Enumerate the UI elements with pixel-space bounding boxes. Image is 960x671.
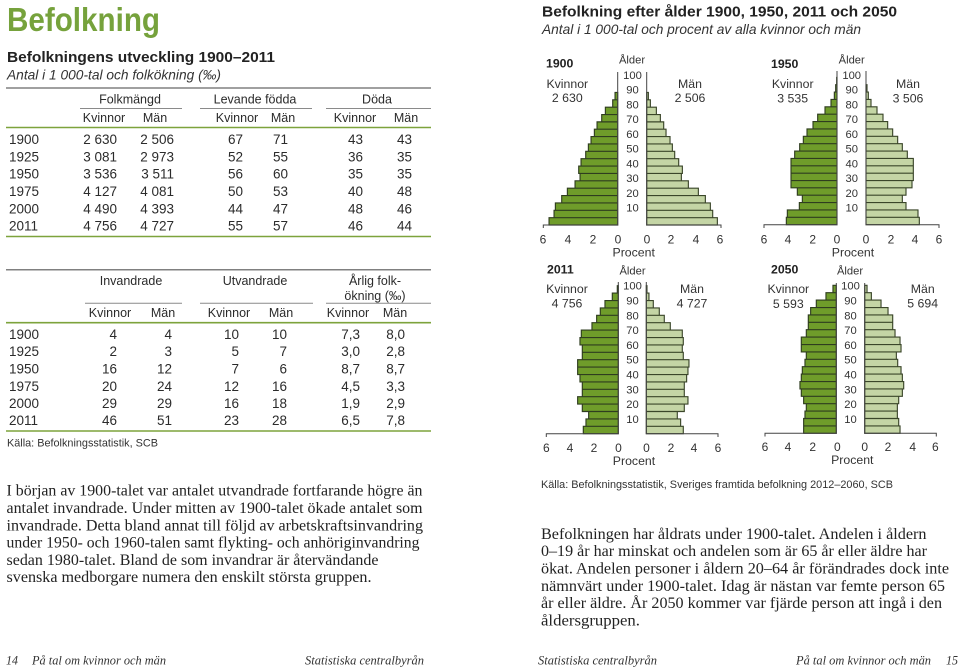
chart: pyramid 2011: 2011 <box>547 263 574 277</box>
text block: immigration <box>6 483 423 586</box>
table: migration and annual growth: 2011 <box>9 413 38 428</box>
source note: left: Källa: Befolkningsstatistik, SCB <box>7 438 158 450</box>
chart: pyramid 2050: 2050 <box>771 263 799 277</box>
table: population, births, deaths: 67 <box>228 132 243 147</box>
table: population, births, deaths: Män <box>271 111 295 125</box>
table: population, births, deaths: 43 <box>348 132 363 147</box>
table: population, births, deaths: 40 <box>348 184 363 199</box>
table: migration and annual growth: 4,5 <box>341 379 360 394</box>
footer: left page: På tal om kvinnor och män <box>31 653 166 668</box>
chart: pyramid 1900: 6 <box>717 232 724 246</box>
table: migration and annual growth: 16 <box>102 362 117 376</box>
heading: table <box>6 49 275 82</box>
table: population, births, deaths: 2 973 <box>140 150 174 164</box>
chart: pyramid 2011: 60 <box>626 340 639 352</box>
chart: pyramid 1900: 80 <box>626 100 639 112</box>
table: population, births, deaths: 44 <box>228 201 243 216</box>
chart: pyramid 2050: 5 593 <box>773 297 804 311</box>
chart: pyramid 1900: 60 <box>626 129 639 141</box>
chart: pyramid 2050: 90 <box>844 296 857 308</box>
table: migration and annual growth: Män <box>269 306 293 320</box>
chart: pyramid 2050: 20 <box>844 399 857 411</box>
table: population, births, deaths: 1950 <box>9 167 39 182</box>
table: migration and annual growth: 6 <box>279 362 287 376</box>
chart: pyramid 2011: 50 <box>626 355 639 367</box>
table: migration and annual growth: 4 <box>109 327 117 342</box>
chart: pyramid 1950: 60 <box>845 129 858 141</box>
chart: pyramid 2050: 2 <box>885 440 892 454</box>
heading: population pyramids: Befolkning efter ålder 1900, 1950, 2011 och 2050 <box>542 4 897 20</box>
table: migration and annual growth: 8,7 <box>386 362 405 376</box>
chart: pyramid 1950: 2 <box>809 232 816 246</box>
table: migration and annual growth: Män <box>383 306 407 320</box>
chart: pyramid 1900: Män <box>678 77 702 91</box>
table: migration and annual growth: 4 <box>164 327 172 342</box>
chart: pyramid 2011: 30 <box>626 384 639 396</box>
chart: pyramid 1900: 20 <box>626 188 639 200</box>
heading: population pyramids: Antal i 1 000-tal och procent av alla kvinnor och män <box>541 22 861 37</box>
chart: pyramid 2050: 50 <box>844 355 857 367</box>
chart: pyramid 1900: 4 <box>693 232 700 246</box>
chart: pyramid 1950: 6 <box>936 232 943 246</box>
chart: pyramid 1900: 50 <box>626 144 639 156</box>
table: migration and annual growth: Kvinnor <box>327 306 369 320</box>
chart: pyramid 1900: 2 <box>590 232 597 246</box>
table: migration and annual growth: Män <box>151 306 175 320</box>
table: migration and annual growth: 3 <box>164 344 172 359</box>
table: population, births, deaths: 35 <box>397 150 412 164</box>
table: migration and annual growth: 1,9 <box>341 396 360 411</box>
text block: ageing: ökat. Andelen personer i åldern 20–64 år förändrades dock inte <box>541 561 949 578</box>
table: migration and annual growth: 1975 <box>9 379 39 394</box>
chart: pyramid 1900: Kvinnor <box>546 77 588 91</box>
table: migration and annual growth: 7 <box>279 344 287 359</box>
table: population, births, deaths: 47 <box>273 201 288 216</box>
table: migration and annual growth: 1950 <box>9 362 39 376</box>
chart: pyramid 1950: 70 <box>845 114 858 126</box>
heading: table: Befolkningens utveckling 1900–2011 <box>7 49 275 66</box>
table: population, births, deaths: 71 <box>273 132 288 147</box>
chart: pyramid 1950: 30 <box>845 173 858 185</box>
chart: pyramid 1950: 3 535 <box>777 92 808 106</box>
chart: pyramid 2050: 10 <box>844 414 857 426</box>
footer: left page <box>6 653 424 668</box>
table: population, births, deaths: 3 536 <box>83 167 117 182</box>
chart: pyramid 2050: Procent <box>831 453 874 467</box>
table: population, births, deaths: 36 <box>348 150 363 164</box>
table: population, births, deaths: 48 <box>397 184 412 199</box>
table: population, births, deaths: 2000 <box>9 201 39 216</box>
chart: pyramid 2011: 2 <box>668 441 675 455</box>
table: migration and annual growth: Årlig folk- <box>349 273 401 288</box>
chart: pyramid 1900: 1900 <box>546 57 574 71</box>
chart: pyramid 2050: 0 <box>834 440 841 454</box>
table: population, births, deaths: 35 <box>348 167 363 182</box>
text block: ageing: Befolkningen har åldrats under 1900-talet. Andelen i åldern <box>541 526 927 543</box>
table: population, births, deaths: 4 081 <box>140 184 174 199</box>
chart: pyramid 2011: 6 <box>715 441 722 455</box>
chart: pyramid 2050: 5 694 <box>907 296 938 310</box>
chart: pyramid 1950: 10 <box>845 203 858 215</box>
chart: pyramid 1950: 6 <box>761 232 768 246</box>
text block: ageing: åldersgruppen. <box>541 612 640 629</box>
table: migration and annual growth: 12 <box>224 379 239 394</box>
chart: pyramid 2050: 4 <box>785 440 792 454</box>
chart: pyramid 2050: 6 <box>932 440 939 454</box>
table: migration and annual growth: Kvinnor <box>208 306 250 320</box>
chart: pyramid 2050: 0 <box>861 440 868 454</box>
chart: pyramid 1950: Män <box>896 77 920 91</box>
chart: pyramid 2011: 70 <box>626 325 639 337</box>
chart: pyramid 2011: 0 <box>643 441 650 455</box>
chart: pyramid 1950: 20 <box>845 188 858 200</box>
table: migration and annual growth: 12 <box>157 362 172 376</box>
table: population, births, deaths: 3 081 <box>83 150 117 164</box>
footer: right page <box>538 653 958 668</box>
table: population, births, deaths: 3 511 <box>141 167 174 182</box>
chart: pyramid 1950: 4 <box>785 232 792 246</box>
table: migration and annual growth: Utvandrade <box>223 274 287 288</box>
heading: table: Antal i 1 000-tal och folkökning (‰) <box>6 68 221 82</box>
chart: pyramid 1900: 90 <box>626 85 639 97</box>
table: population, births, deaths: 46 <box>397 201 412 216</box>
chart: pyramid 2050: 100 <box>841 281 860 293</box>
table: migration and annual growth: 7,8 <box>386 413 405 428</box>
table: population, births, deaths: 2 506 <box>140 132 174 147</box>
chart: pyramid 2011: 4 756 <box>552 296 583 310</box>
table: population, births, deaths: 56 <box>228 167 243 182</box>
table: population, births, deaths: Döda <box>362 92 392 106</box>
heading: population pyramids <box>541 4 897 37</box>
title: Befolkning <box>7 1 160 38</box>
table: population, births, deaths: 2011 <box>9 219 38 234</box>
footer: left page: 14 <box>6 653 18 668</box>
chart: pyramid 1900: 100 <box>623 70 642 82</box>
text block: immigration: I början av 1900-talet var antalet utvandrade fortfarande högre än <box>6 483 423 500</box>
chart: pyramid 2011: 4 <box>567 441 574 455</box>
chart: pyramid 2011: 40 <box>626 370 639 382</box>
table: population, births, deaths: 1925 <box>9 150 39 164</box>
text block: ageing <box>541 526 949 629</box>
table: migration and annual growth: 29 <box>157 396 172 411</box>
table: population, births, deaths: Kvinnor <box>83 111 125 125</box>
chart: pyramid 2050: 40 <box>844 370 857 382</box>
table: migration and annual growth: 3,3 <box>386 379 405 394</box>
table: population, births, deaths: 48 <box>348 201 363 216</box>
chart: pyramid 1950: 4 <box>912 232 919 246</box>
table: migration and annual growth: 28 <box>272 413 287 428</box>
chart: pyramid 1950: 40 <box>845 158 858 170</box>
chart: pyramid 2050: 4 <box>909 440 916 454</box>
table: population, births, deaths: 46 <box>348 219 363 234</box>
table: population, births, deaths: Män <box>143 111 167 125</box>
chart: pyramid 1900: 4 <box>565 232 572 246</box>
chart: pyramid 2011: Procent <box>613 454 656 468</box>
table: migration and annual growth: 2,8 <box>386 344 405 359</box>
table: migration and annual growth: 1900 <box>9 327 39 342</box>
table: population, births, deaths: 4 127 <box>83 184 117 199</box>
chart: pyramid 2011: 90 <box>626 296 639 308</box>
text block: ageing: nämnvärt under 1900-talet. Idag är nästan var femte person 65 <box>541 578 945 595</box>
chart: pyramid 2050: Kvinnor <box>767 282 809 296</box>
chart: pyramid 2050: Ålder <box>837 265 863 278</box>
chart: pyramid 1900: 40 <box>626 158 639 170</box>
chart: pyramid 1900: 30 <box>626 173 639 185</box>
footer: left page: Statistiska centralbyrån <box>305 653 424 668</box>
table: population, births, deaths: 57 <box>273 219 288 234</box>
chart: pyramid 1900: 2 <box>668 232 675 246</box>
chart: pyramid 1900: 70 <box>626 114 639 126</box>
chart: pyramid 2050: 6 <box>762 440 769 454</box>
chart: pyramid 1950 <box>761 54 943 260</box>
chart: pyramid 1900: 0 <box>615 232 622 246</box>
chart: pyramid 2011: 20 <box>626 399 639 411</box>
table: migration and annual growth: 51 <box>157 413 172 428</box>
chart: pyramid 2050: 2 <box>809 440 816 454</box>
table: migration and annual growth: 8,0 <box>386 327 405 342</box>
table: migration and annual growth: 7 <box>231 362 239 376</box>
table: migration and annual growth: 23 <box>224 413 239 428</box>
table: migration and annual growth: 2000 <box>9 396 39 411</box>
text block: immigration: antalet invandrade. Under mitten av 1900-talet ökade antalet som <box>6 500 423 517</box>
table: population, births, deaths: 4 393 <box>140 201 174 216</box>
text block: immigration: svenska medborgare numera den enskilt största gruppen. <box>6 569 372 586</box>
table: population, births, deaths <box>6 88 431 236</box>
chart: pyramid 1950: 0 <box>834 232 841 246</box>
chart: pyramid 2011 <box>543 263 722 468</box>
text block: immigration: under 1950- och 1960-talen samt flykting- och anhöriginvandring <box>6 534 420 552</box>
chart: pyramid 1900: 10 <box>626 203 639 215</box>
table: migration and annual growth: 16 <box>224 396 239 411</box>
table: population, births, deaths: 60 <box>273 167 288 182</box>
chart: pyramid 1950: Ålder <box>839 54 865 67</box>
chart: pyramid 2011: 4 <box>691 441 698 455</box>
table: migration and annual growth: 3,0 <box>341 344 360 359</box>
table: population, births, deaths: 4 490 <box>83 201 117 216</box>
table: population, births, deaths: 53 <box>273 184 288 199</box>
chart: pyramid 1950: 2 <box>888 232 895 246</box>
chart: pyramid 2011: 80 <box>626 310 639 322</box>
table: migration and annual growth: 16 <box>272 379 287 394</box>
table: migration and annual growth: 2,9 <box>386 396 405 411</box>
table: migration and annual growth: 10 <box>224 327 239 342</box>
table: population, births, deaths: Män <box>394 111 418 125</box>
chart: pyramid 2050: 80 <box>844 310 857 322</box>
source note: right: Källa: Befolkningsstatistik, Sveriges framtida befolkning 2012–2060, SCB <box>541 479 893 491</box>
chart: pyramid 1900: 6 <box>540 232 547 246</box>
table: population, births, deaths: Kvinnor <box>334 111 376 125</box>
chart: pyramid 1900 <box>540 54 724 260</box>
table: migration and annual growth: 8,7 <box>341 362 360 376</box>
table: migration and annual growth: Kvinnor <box>89 306 131 320</box>
chart: pyramid 1950: 0 <box>863 232 870 246</box>
table: migration and annual growth: 5 <box>231 344 239 359</box>
table: migration and annual growth: 10 <box>272 327 287 342</box>
chart: pyramid 2050: 30 <box>844 384 857 396</box>
table: population, births, deaths: 43 <box>397 132 412 147</box>
chart: pyramid 2050: Män <box>911 282 935 296</box>
table: migration and annual growth: 2 <box>109 344 117 359</box>
chart: pyramid 2011: 6 <box>543 441 550 455</box>
chart: pyramid 1900: Procent <box>613 246 655 260</box>
table: population, births, deaths: 55 <box>228 219 243 234</box>
chart: pyramid 1950: 1950 <box>771 57 799 71</box>
text block: ageing: 0–19 år har minskat och andelen som är 65 år eller äldre har <box>541 543 927 560</box>
footer: right page: 15 <box>946 653 958 668</box>
chart: pyramid 2011: 100 <box>623 281 642 293</box>
table: population, births, deaths: Kvinnor <box>216 111 258 125</box>
table: migration and annual growth: 1925 <box>9 344 39 359</box>
table: population, births, deaths: 2 630 <box>83 132 117 147</box>
table: migration and annual growth: ökning (‰) <box>344 289 406 303</box>
chart: pyramid 1950: 100 <box>842 70 861 82</box>
chart: pyramid 1950: 3 506 <box>893 92 924 106</box>
table: population, births, deaths: 50 <box>228 184 243 199</box>
table: population, births, deaths: 44 <box>397 219 412 234</box>
footer: right page: På tal om kvinnor och män <box>795 653 931 668</box>
chart: pyramid 1950: 80 <box>845 100 858 112</box>
chart: pyramid 2011: 0 <box>615 441 622 455</box>
footer: right page: Statistiska centralbyrån <box>538 653 657 668</box>
chart: pyramid 2050 <box>762 263 939 467</box>
table: population, births, deaths: 4 756 <box>83 219 117 234</box>
chart: pyramid 1900: Ålder <box>619 54 645 67</box>
chart: pyramid 2011: 2 <box>591 441 598 455</box>
table: population, births, deaths: 1975 <box>9 184 39 199</box>
table: migration and annual growth: 6,5 <box>341 413 360 428</box>
table: migration and annual growth: 18 <box>272 396 287 411</box>
text block: immigration: invandrade. Detta bland annat till följd av arbetskraftsinvandring <box>6 517 423 534</box>
chart: pyramid 2011: 10 <box>626 414 639 426</box>
chart: pyramid 2011: Kvinnor <box>546 282 588 296</box>
table: migration and annual growth <box>6 270 431 431</box>
table: migration and annual growth: 46 <box>102 413 117 428</box>
chart: pyramid 1900: 0 <box>644 232 651 246</box>
table: migration and annual growth: 7,3 <box>341 327 360 342</box>
chart: pyramid 2050: 60 <box>844 340 857 352</box>
chart: pyramid 1950: Kvinnor <box>772 77 814 91</box>
table: population, births, deaths: 35 <box>397 167 412 182</box>
text block: immigration: sedan 1980-talet. Bland de som invandrar är återvändande <box>6 552 379 569</box>
table: migration and annual growth: Invandrade <box>100 274 162 288</box>
table: population, births, deaths: Levande födda <box>214 92 296 106</box>
table: migration and annual growth: 20 <box>102 379 117 394</box>
chart: pyramid 1900: 2 630 <box>552 91 583 105</box>
chart: pyramid 1950: 50 <box>845 144 858 156</box>
table: population, births, deaths: 4 727 <box>140 219 174 234</box>
chart: pyramid 1950: 90 <box>845 85 858 97</box>
chart: pyramid 1900: 2 506 <box>675 91 706 105</box>
table: population, births, deaths: 52 <box>228 150 243 164</box>
chart: pyramid 2011: 4 727 <box>677 296 708 310</box>
table: population, births, deaths: 1900 <box>9 132 39 147</box>
table: population, births, deaths: Folkmängd <box>99 92 161 106</box>
table: migration and annual growth: 29 <box>102 396 117 411</box>
chart: pyramid 2011: Ålder <box>619 265 646 278</box>
chart: pyramid 2011: Män <box>680 282 704 296</box>
chart: pyramid 2050: 70 <box>844 325 857 337</box>
chart: pyramid 1950: Procent <box>832 246 875 260</box>
table: population, births, deaths: 55 <box>273 150 288 164</box>
text block: ageing: år eller äldre. År 2050 kommer var fjärde person att ingå i den <box>541 595 942 612</box>
table: migration and annual growth: 24 <box>157 379 172 394</box>
